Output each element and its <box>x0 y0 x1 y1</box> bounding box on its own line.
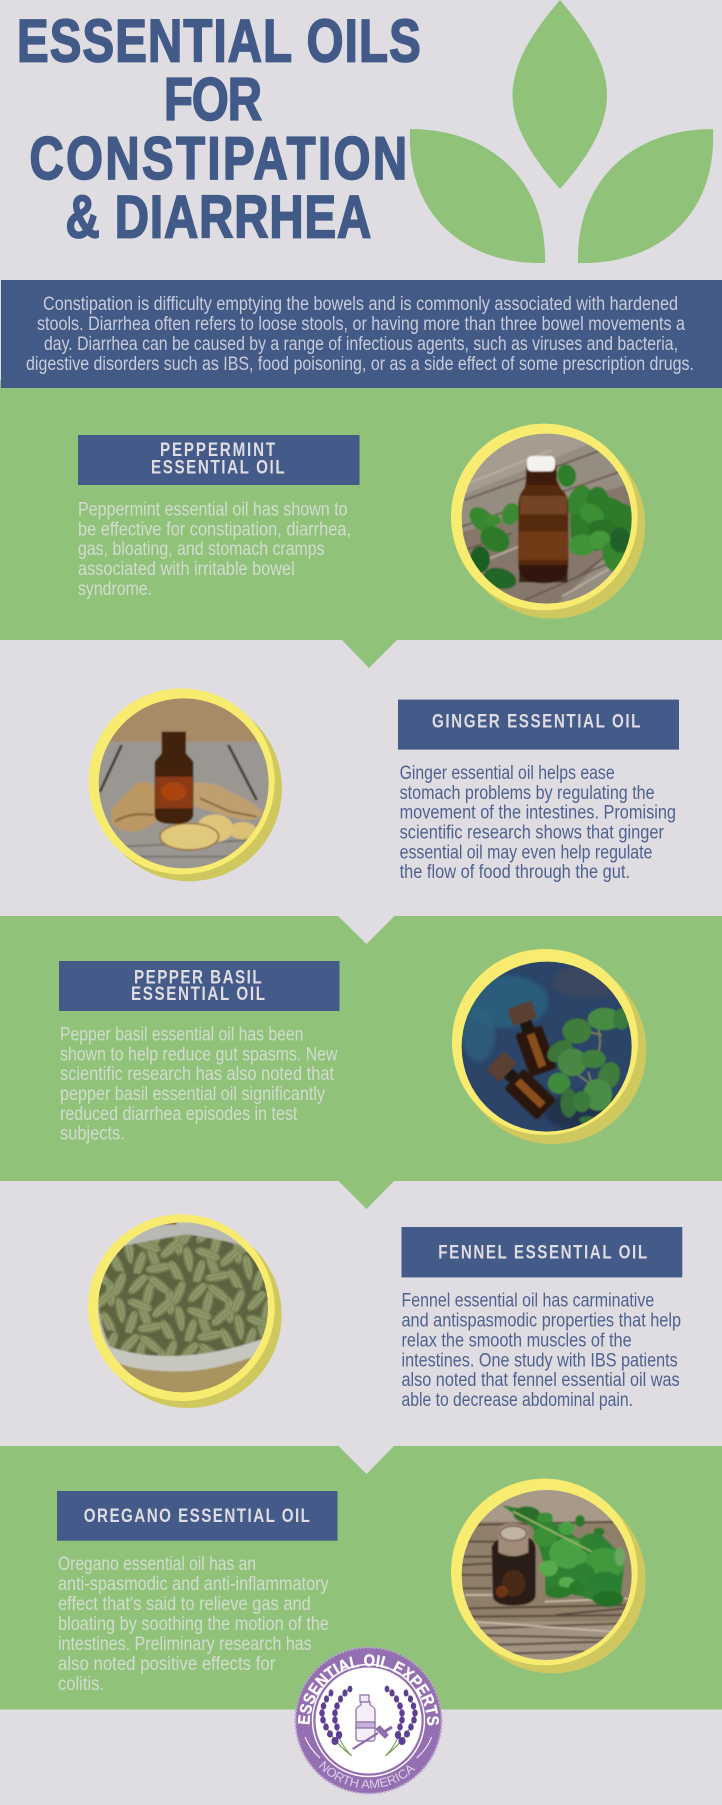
text: peppermint body <box>78 499 351 600</box>
text: oregano body: intestines. Preliminary research has <box>58 1634 312 1655</box>
title: ESSENTIAL OILS <box>17 8 421 75</box>
text: fennel body: and antispasmodic properties that help <box>402 1311 681 1332</box>
bottles <box>506 1000 557 1077</box>
heading: ginger: GINGER ESSENTIAL OIL <box>432 710 640 732</box>
logo text bottom: NORTH AMERICA <box>319 1761 416 1788</box>
panel: intro <box>1 280 722 388</box>
text: oregano body: bloating by soothing the motion of the <box>58 1614 329 1635</box>
bottle <box>492 1538 536 1606</box>
intro text <box>26 294 694 375</box>
panel: ginger <box>89 688 679 883</box>
heading: pepper basil: PEPPER BASIL <box>134 966 262 988</box>
text: pepper basil body <box>60 1024 338 1145</box>
bottle <box>518 465 568 583</box>
logo badge: Essential Oil Experts <box>294 1646 442 1794</box>
panel: peppermint <box>78 424 645 619</box>
heading: peppermint: PEPPERMINT <box>160 438 276 460</box>
text: peppermint body: gas, bloating, and stomach cramps <box>78 539 325 560</box>
oregano leaves <box>502 1505 625 1607</box>
logo text top: ESSENTIAL OIL EXPERTS <box>298 1654 439 1726</box>
heading: pepper basil: ESSENTIAL OIL <box>131 983 265 1005</box>
text: pepper basil body: reduced diarrhea episodes in test <box>60 1104 298 1125</box>
text: ginger body: scientific research shows that ginger <box>400 822 665 843</box>
text: fennel body <box>402 1291 681 1411</box>
ginger slices <box>229 822 257 839</box>
text: peppermint body: be effective for constipation, diarrhea, <box>78 519 351 540</box>
title: CONSTIPATION <box>30 126 407 192</box>
photo: ginger oil bottle <box>89 688 282 881</box>
heading: fennel <box>402 1227 682 1277</box>
text: peppermint body: Peppermint essential oil has shown to <box>78 499 348 520</box>
heading: fennel: FENNEL ESSENTIAL OIL <box>438 1241 647 1263</box>
text: pepper basil body: pepper basil essential oil significantly <box>60 1084 325 1105</box>
panel: fennel <box>88 1214 682 1411</box>
text: peppermint body: associated with irritable bowel <box>78 559 295 580</box>
logo lavender wreaths <box>319 1686 418 1756</box>
text: pepper basil body: scientific research has also noted that <box>60 1064 335 1085</box>
panel: pepper basil <box>59 949 646 1145</box>
text: pepper basil body: subjects. <box>60 1124 125 1145</box>
logo bottle and dropper <box>353 1695 392 1749</box>
text: fennel body: able to decrease abdominal pain. <box>402 1390 633 1411</box>
text: ginger body: essential oil may even help regulate <box>400 842 652 863</box>
text: ginger body: stomach problems by regulating the <box>400 783 655 804</box>
text: oregano body <box>58 1554 329 1695</box>
text: oregano body: effect that's said to relieve gas and <box>58 1594 311 1615</box>
photo: pepper basil bottles <box>452 949 646 1144</box>
heading: oregano <box>57 1491 338 1541</box>
panel: green sections background <box>0 380 722 1710</box>
leaves <box>578 1028 602 1085</box>
bottle <box>155 732 193 824</box>
photo: peppermint oil bottle <box>451 424 645 619</box>
text: ginger body: Ginger essential oil helps ease <box>400 763 615 784</box>
heading: oregano: OREGANO ESSENTIAL OIL <box>84 1504 310 1526</box>
heading: pepper basil <box>59 961 340 1011</box>
text: oregano body: also noted positive effects for <box>58 1654 276 1675</box>
photo: fennel seeds <box>88 1214 282 1408</box>
text: oregano body: anti-spasmodic and anti-inflammatory <box>58 1574 329 1595</box>
heading: peppermint <box>78 435 360 485</box>
mint left <box>468 502 520 590</box>
heading: peppermint: ESSENTIAL OIL <box>151 456 285 478</box>
title <box>17 8 421 251</box>
text: fennel body: intestines. One study with IBS patients <box>402 1350 678 1371</box>
text: ginger body: the flow of food through the gut. <box>400 862 630 883</box>
text: fennel body: also noted that fennel essential oil was <box>402 1370 680 1391</box>
text: pepper basil body: Pepper basil essential oil has been <box>60 1024 303 1046</box>
mint right <box>556 463 634 576</box>
photo: oregano bottle <box>451 1479 646 1673</box>
text: fennel body: relax the smooth muscles of the <box>402 1330 632 1351</box>
title: FOR <box>164 67 262 133</box>
heading: ginger <box>398 700 679 750</box>
text: oregano body: Oregano essential oil has an <box>58 1554 256 1575</box>
text: ginger body <box>400 763 676 883</box>
text: peppermint body: syndrome. <box>78 579 152 600</box>
text: pepper basil body: shown to help reduce gut spasms. New <box>60 1044 338 1066</box>
ginger roots <box>112 782 160 832</box>
text: oregano body: colitis. <box>58 1674 104 1695</box>
text: fennel body: Fennel essential oil has carminative <box>402 1291 654 1312</box>
text: ginger body: movement of the intestines. Promising <box>400 802 676 823</box>
panel: oregano <box>57 1479 646 1695</box>
title: & DIARRHEA <box>66 184 371 251</box>
logo side lines <box>305 1737 432 1758</box>
icon: three green leaves <box>410 0 713 263</box>
